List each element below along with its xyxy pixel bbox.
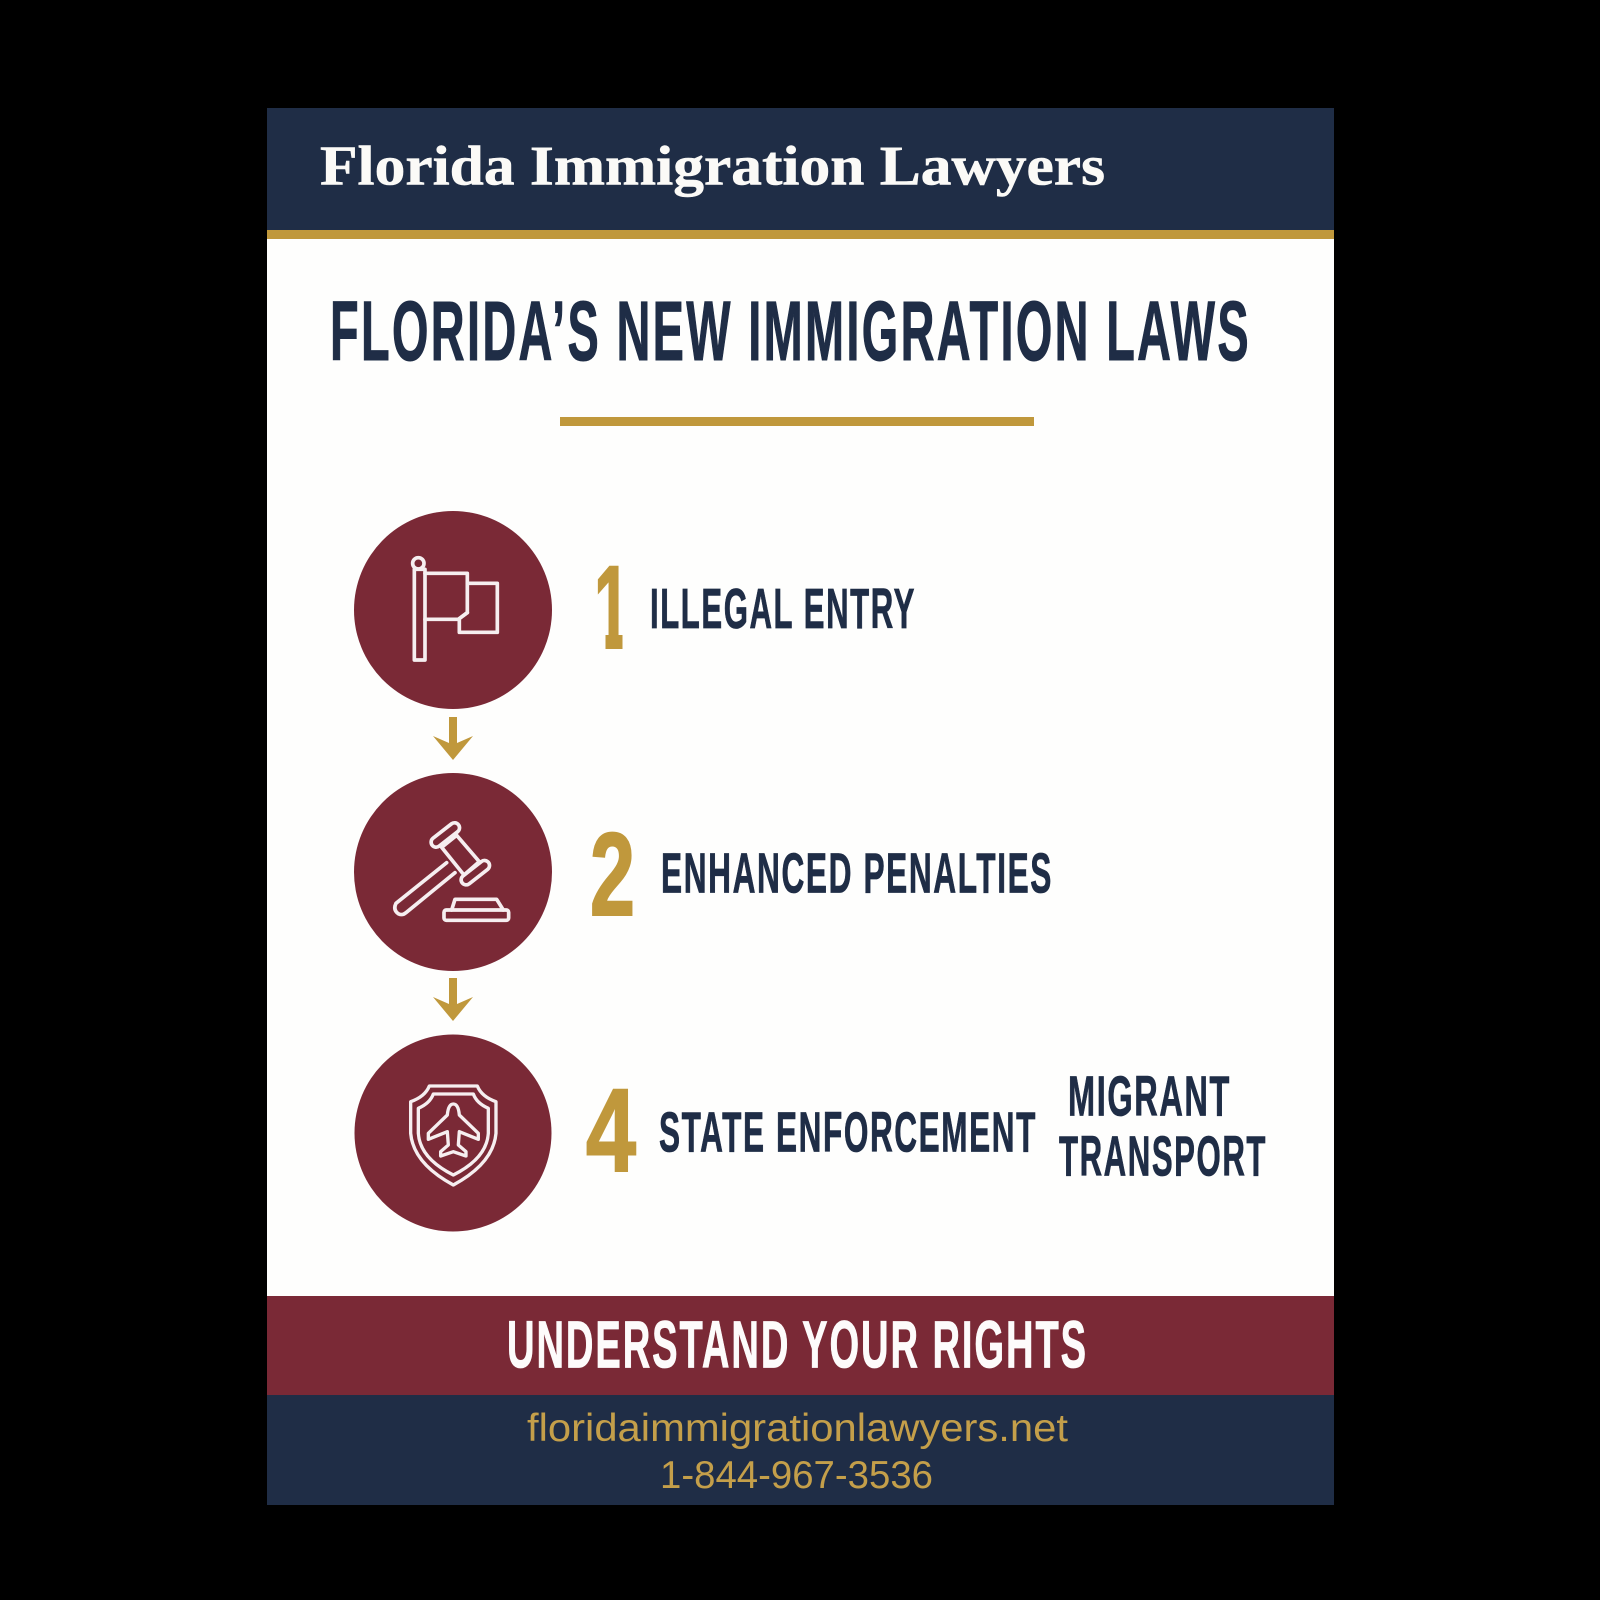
number 2: 2 (590, 809, 635, 941)
label: illegal entry: ILLEGAL ENTRY (650, 577, 916, 641)
gold title rule (560, 417, 1034, 426)
label: migrant transport: MIGRANT (1068, 1064, 1231, 1128)
gold header stripe (267, 230, 1334, 239)
icon: shield with plane in circle (354, 1034, 552, 1232)
call to action text: UNDERSTAND YOUR RIGHTS (507, 1308, 1088, 1382)
label: enhanced penalties: ENHANCED PENALTIES (661, 842, 1053, 906)
number 4: 4 (586, 1065, 636, 1197)
arrow 1 (433, 717, 473, 760)
header band (267, 108, 1334, 230)
label: migrant transport (1059, 1064, 1267, 1188)
number 1: 1 (594, 542, 630, 674)
call to action band (267, 1296, 1334, 1395)
step 4: state enforcement and migrant transport (354, 1034, 1267, 1232)
phone number: 1-844-967-3536 (660, 1454, 933, 1497)
website: floridaimmigrationlawyers.net (527, 1407, 1068, 1450)
label: migrant transport: TRANSPORT (1059, 1124, 1267, 1188)
step 1: illegal entry (354, 511, 916, 709)
footer band (267, 1395, 1334, 1505)
icon: gavel in circle (354, 773, 552, 971)
label: state enforcement: STATE ENFORCEMENT (659, 1100, 1037, 1164)
header firm name: Florida Immigration Lawyers (320, 136, 1105, 198)
icon: flag in circle (354, 511, 552, 709)
poster panel (267, 108, 1334, 1505)
arrow 2 (433, 978, 473, 1021)
step 2: enhanced penalties (354, 773, 1053, 971)
